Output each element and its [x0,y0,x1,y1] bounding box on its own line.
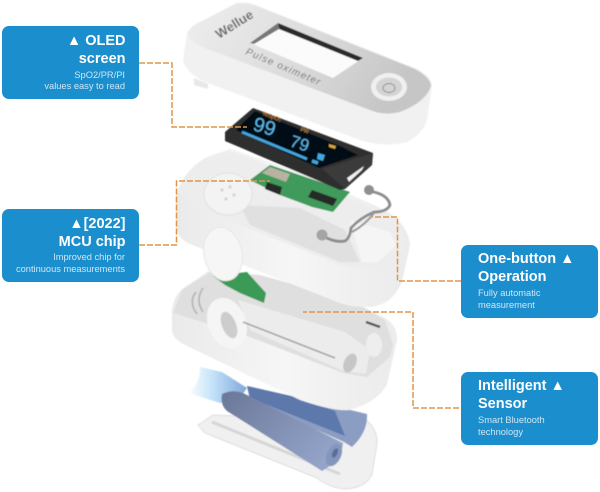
connector: intelligent sensor [303,312,459,408]
OLED readings: 99 [251,114,278,141]
OLED display module [225,108,373,190]
battery cover [198,415,377,489]
screen window [250,23,363,78]
blue glow [188,367,247,403]
OLED display module: %SpO₂ [261,111,282,124]
callout: MCU chip: MCU chip [59,234,126,250]
metal rod [243,322,335,358]
hinge socket [200,292,254,354]
callout: OLED screen: values easy to read [44,81,125,91]
callout: MCU chip: continuous measurements [16,264,125,274]
callout: one-button operation: Fully automatic [478,288,541,298]
brand text: Wellue [213,7,256,42]
callout: OLED screen: SpO2/PR/PI [74,70,125,80]
callout: intelligent sensor [461,372,598,445]
top cover [183,2,432,145]
callout: intelligent sensor: Sensor [478,396,528,412]
callout: MCU chip: Improved chip for [53,252,125,262]
rear battery [247,386,367,447]
callout: OLED screen: ▲ OLED [67,33,126,49]
connector: one-button operation [372,217,461,281]
callout: one-button operation: One-button ▲ [478,251,574,267]
front battery [222,391,343,471]
speaker disc [204,173,252,215]
wire contact [323,191,390,241]
PCB [250,165,350,212]
callout: one-button operation [461,245,598,318]
round button [199,224,247,284]
OLED display module: 79 [288,132,312,156]
battery contact spring [192,288,203,314]
callout: OLED screen [2,26,139,99]
callout: intelligent sensor: Intelligent ▲ [478,378,565,394]
middle body shell [176,149,410,307]
callout: intelligent sensor: Smart Bluetooth [478,415,545,425]
callout: one-button operation: measurement [478,300,535,310]
connector: MCU chip [139,181,270,245]
callout: intelligent sensor: technology [478,427,523,437]
lower body shell [172,270,397,410]
oximeter exploded illustration [172,2,432,489]
top cover: Pulse oximeter [244,47,322,88]
callout: MCU chip: ▲[2022] [69,216,126,232]
bottom cover and batteries [188,367,377,489]
OLED display module: PR [299,127,310,136]
callout: MCU chip [2,209,139,282]
connector: OLED screen [139,63,247,127]
callout: OLED screen: screen [79,51,126,67]
lower PCB [213,272,266,303]
power button [371,73,407,101]
callout: one-button operation: Operation [478,269,546,285]
